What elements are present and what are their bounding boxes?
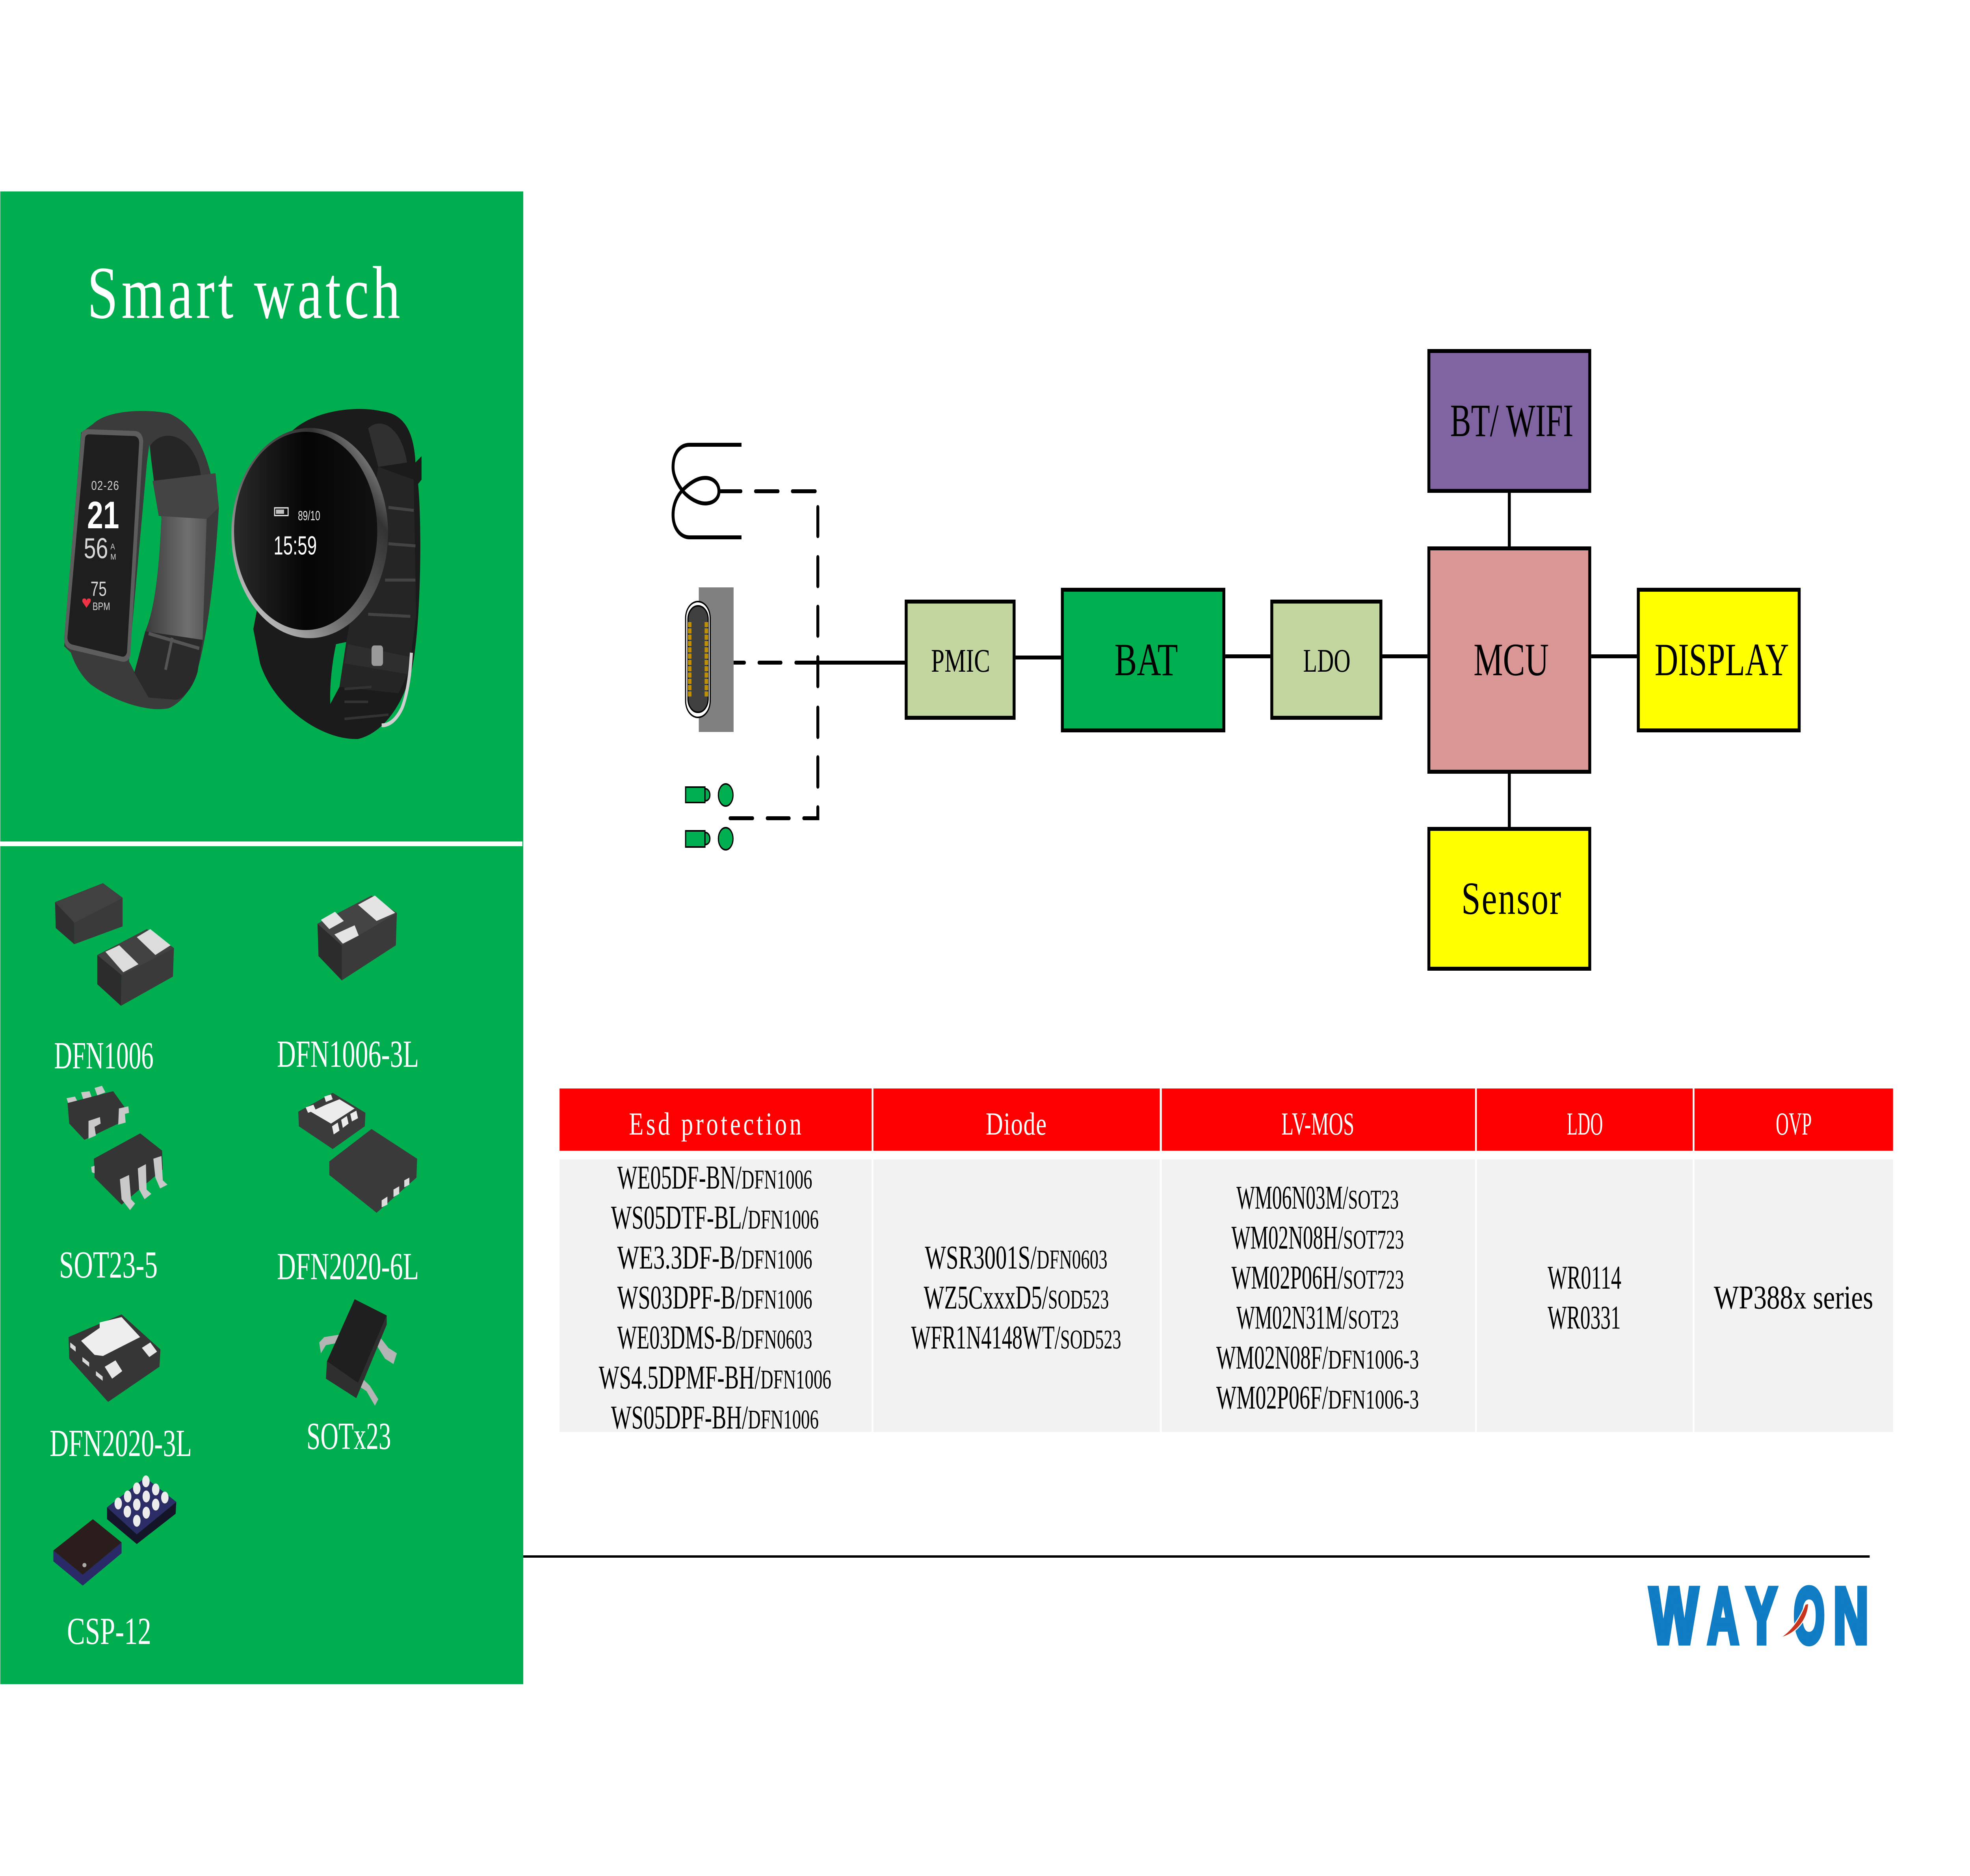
column: Diode parts: SOD523 [1060, 1325, 1121, 1355]
table header row: Diode [986, 1106, 1046, 1142]
table header row: Esd protection [629, 1106, 801, 1142]
connectors [1016, 493, 1637, 827]
column: LV-MOS parts: WM02P06F/ [1216, 1379, 1328, 1416]
logo: WAYON [1650, 1572, 1868, 1660]
column: LV-MOS parts: DFN1006-3 [1328, 1385, 1419, 1415]
logo: WAYON: Y [1747, 1572, 1777, 1660]
logo: WAYON: W [1650, 1572, 1698, 1660]
label: DFN1006-3L: DFN1006-3L [277, 1033, 419, 1075]
block: Sensor [1429, 829, 1590, 969]
column: LV-MOS parts: SOT23 [1348, 1305, 1399, 1335]
block: PMIC [906, 602, 1014, 718]
chip image: CSP-12 [53, 1475, 176, 1586]
label: DFN1006: DFN1006 [54, 1034, 154, 1077]
column: LV-MOS parts: SOT23 [1348, 1185, 1399, 1215]
block: MCU: MCU [1474, 634, 1549, 685]
column: Diode parts: WZ5CxxxD5/ [924, 1279, 1048, 1316]
column: Diode parts: WFR1N4148WT/ [911, 1319, 1060, 1356]
panel: green sidebar [0, 191, 523, 1684]
dashed connector lines [719, 491, 818, 818]
block diagram [673, 351, 1799, 969]
block: LDO [1272, 602, 1381, 718]
column: Esd protection parts: DFN0603 [742, 1325, 812, 1355]
image: band-style smart watch: 75 [91, 578, 107, 600]
block: BAT [1062, 590, 1224, 730]
icon: coil antenna [673, 445, 742, 537]
column: Esd protection parts: DFN1006 [742, 1285, 812, 1315]
column: Esd protection parts [599, 1159, 831, 1436]
image: band-style smart watch: 02-26 [91, 479, 119, 493]
block: LDO: LDO [1303, 643, 1351, 679]
column: LV-MOS parts: WM02P06H/ [1231, 1259, 1343, 1296]
title: Smart watch: Smart watch [87, 252, 400, 334]
solid link to PMIC [818, 661, 905, 665]
column: Esd protection parts: WS05DTF-BL/ [611, 1199, 748, 1236]
column: Esd protection parts: WE3.3DF-B/ [617, 1239, 742, 1276]
column: Diode parts: DFN0603 [1037, 1245, 1108, 1275]
image: band-style smart watch: BPM [93, 600, 110, 613]
column: LV-MOS parts: SOT723 [1343, 1225, 1404, 1255]
chip image: DFN1006-3L [318, 895, 397, 981]
block: BAT: BAT [1115, 634, 1178, 685]
column: Esd protection parts: DFN1006 [760, 1365, 831, 1395]
logo: WAYON: A [1708, 1572, 1739, 1660]
chip image: DFN2020-3L [69, 1314, 160, 1402]
column: LDO parts: WR0331 [1548, 1299, 1621, 1336]
column: Esd protection parts: WS03DPF-B/ [617, 1279, 742, 1316]
table body backgrounds [559, 1159, 1893, 1432]
column: Esd protection parts: WS4.5DPMF-BH/ [599, 1359, 760, 1396]
table: product list [559, 1088, 1893, 1436]
column: Esd protection parts: DFN1006 [748, 1205, 819, 1235]
column: LDO parts [1548, 1259, 1621, 1336]
chip image: DFN1006 [55, 883, 174, 1006]
column: LV-MOS parts [1216, 1179, 1419, 1416]
chip image: SOT23-5 [67, 1086, 167, 1210]
column: LV-MOS parts: WM02N08H/ [1231, 1219, 1343, 1256]
column: Esd protection parts: WE03DMS-B/ [617, 1319, 742, 1356]
footer rule [523, 1555, 1870, 1558]
column: Esd protection parts: DFN1006 [748, 1405, 819, 1435]
column: LV-MOS parts: DFN1006-3 [1328, 1345, 1419, 1375]
label: SOT23-5: SOT23-5 [59, 1243, 158, 1286]
chip image: SOTx23 [319, 1299, 397, 1406]
block: BT/WIFI [1429, 351, 1590, 491]
column: OVP parts: WP388x series [1714, 1279, 1873, 1316]
column: LV-MOS parts: WM02N08F/ [1216, 1339, 1328, 1376]
column: LV-MOS parts: SOT723 [1343, 1265, 1404, 1295]
image: band-style smart watch [64, 411, 219, 709]
table header row [559, 1088, 1893, 1151]
column: LV-MOS parts: WM02N31M/ [1236, 1299, 1348, 1336]
icon: LED indicators [686, 784, 733, 850]
block: DISPLAY [1638, 590, 1799, 730]
table header row: OVP [1776, 1106, 1812, 1142]
image: band-style smart watch: 21 [87, 493, 119, 537]
column: Diode parts: SOD523 [1048, 1285, 1109, 1315]
label: CSP-12: CSP-12 [67, 1610, 151, 1653]
column: Esd protection parts: WS05DPF-BH/ [611, 1399, 748, 1436]
block: DISPLAY: DISPLAY [1655, 634, 1789, 685]
column: Diode parts [911, 1239, 1121, 1356]
block: Sensor: Sensor [1461, 873, 1561, 924]
label: DFN2020-3L: DFN2020-3L [50, 1422, 192, 1465]
image: round smart watch: 89/10 [298, 508, 320, 523]
image: band-style smart watch: A [110, 542, 115, 552]
column: Esd protection parts: DFN1006 [742, 1245, 812, 1275]
image: round smart watch [231, 409, 422, 739]
label: DFN2020-6L: DFN2020-6L [277, 1245, 419, 1288]
column: LDO parts: WR0114 [1548, 1259, 1621, 1296]
label: SOTx23: SOTx23 [307, 1415, 391, 1458]
logo: WAYON: O [1793, 1572, 1825, 1660]
image: band-style smart watch: M [110, 552, 116, 562]
column: Diode parts: WSR3001S/ [925, 1239, 1037, 1276]
icon: USB-C port [686, 587, 734, 732]
block: PMIC: PMIC [931, 643, 990, 679]
image: round smart watch: 15:59 [273, 530, 317, 560]
column: Esd protection parts: WE05DF-BN/ [617, 1159, 742, 1196]
column: LV-MOS parts: WM06N03M/ [1236, 1179, 1348, 1216]
logo: WAYON: N [1833, 1572, 1868, 1660]
block: BT/WIFI: BT/ WIFI [1450, 395, 1573, 446]
column: Esd protection parts: DFN1006 [742, 1165, 812, 1195]
image: band-style smart watch: 56 [84, 533, 108, 565]
chip image: DFN2020-6L [298, 1093, 417, 1213]
block: MCU [1429, 548, 1590, 772]
table header row: LV-MOS [1281, 1106, 1354, 1142]
table header row: LDO [1567, 1106, 1603, 1142]
